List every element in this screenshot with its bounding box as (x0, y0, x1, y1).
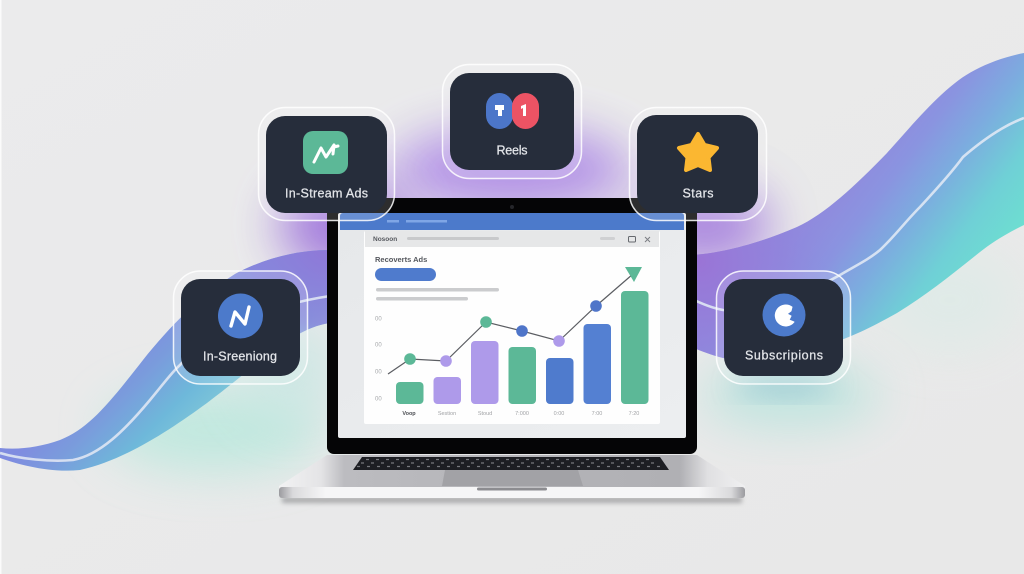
x axis labels: Stoud (478, 411, 492, 417)
card: In-Stream Ads (258, 108, 394, 220)
wave: right ribbon (690, 53, 1024, 360)
label: Reels (496, 144, 528, 158)
glow: purple behind cards (279, 128, 771, 273)
icon: blue N (218, 294, 263, 338)
y axis labels: 00 (375, 396, 382, 402)
screen background (338, 213, 686, 438)
y axis labels: 00 (375, 342, 382, 348)
keyboard (353, 457, 669, 470)
x axis labels: 7:20 (629, 411, 639, 417)
card: In-Sreeniong (174, 271, 308, 384)
x axis labels: Voop (402, 411, 416, 417)
x axis labels: Sestion (438, 411, 456, 417)
text lines (376, 288, 499, 300)
icon: star (679, 134, 717, 170)
bezel (327, 198, 697, 454)
label: Subscripions (745, 348, 823, 362)
camera (510, 205, 514, 209)
laptop (279, 198, 745, 503)
icon: green trend (303, 131, 348, 174)
icon: blue C (762, 294, 806, 336)
x axis labels: 0:00 (554, 411, 564, 417)
glow: mint under waves (105, 250, 1020, 472)
y axis labels: 00 (375, 316, 382, 322)
laptop shadow (282, 497, 742, 503)
wave: left ribbon (0, 250, 330, 471)
laptop front lip (279, 487, 745, 498)
x axis labels: 7:00 (592, 411, 602, 417)
screen top bar (340, 213, 684, 230)
trend line (388, 267, 642, 374)
bar chart (396, 291, 648, 404)
notch (477, 488, 547, 490)
chart heading: Recoverts Ads (375, 255, 427, 264)
card: Subscriptions (716, 271, 850, 384)
label: Stars (682, 186, 714, 200)
label: In-Stream Ads (285, 186, 368, 200)
trackpad (442, 470, 583, 486)
app window (364, 231, 660, 424)
x axis labels (402, 411, 639, 417)
card: Reels (442, 64, 582, 178)
x axis labels: 7:000 (515, 411, 529, 417)
label: In-Sreeniong (203, 350, 277, 364)
icon: reels pills (486, 93, 539, 129)
window header text: Nosoon (373, 236, 397, 243)
laptop base deck (279, 455, 745, 490)
window controls (628, 236, 650, 242)
y axis labels: 00 (375, 370, 382, 376)
card: Stars (630, 108, 766, 220)
y axis labels (375, 316, 382, 402)
blue pill (375, 268, 436, 281)
